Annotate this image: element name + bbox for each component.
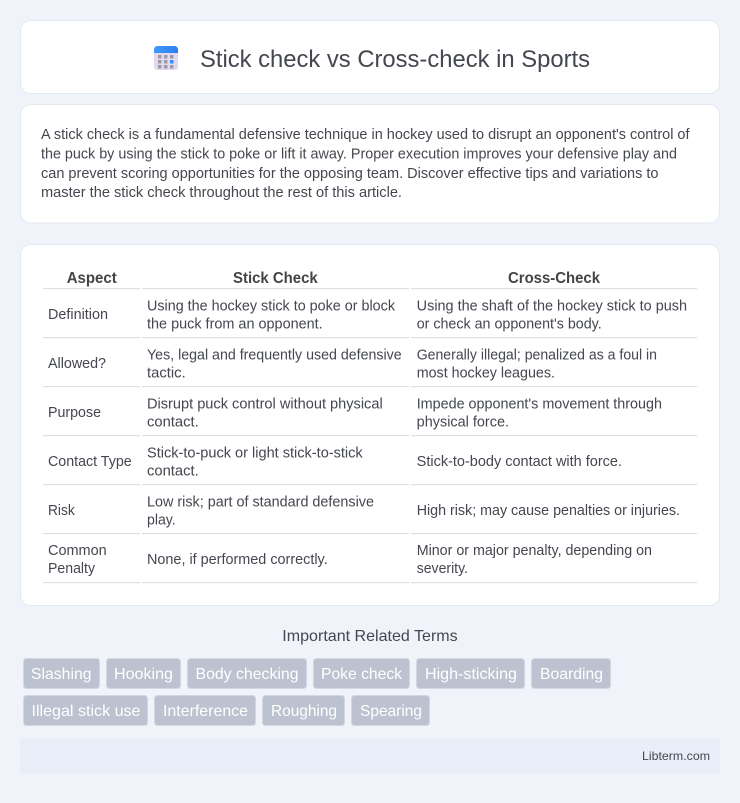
tag: poke check: Poke check [321,666,403,683]
tag: spearing: Spearing [360,703,422,720]
row: purpose [43,396,697,436]
row: common penalty: Common [48,543,107,559]
tags: related terms [24,658,610,726]
row: common penalty: Minor or major penalty, depending on [417,543,652,559]
row: contact type: contact. [147,464,199,480]
row: allowed: Yes, legal and frequently used defensive [147,348,402,364]
intro paragraph: can prevent scoring opportunities for the opposing team. Discover effective tips and variations to [41,166,658,182]
table header: Cross-Check [508,270,600,287]
tag: spearing [352,696,430,726]
tag: illegal stick use: Illegal stick use [32,703,141,720]
row: definition [43,298,697,338]
row: risk [43,494,697,534]
table header: Stick Check [233,270,318,287]
row: definition: Using the shaft of the hockey stick to push [417,298,687,314]
tag: roughing [262,696,344,726]
heading: important related terms: Important Related Terms [282,628,458,645]
row: risk: play. [147,512,176,528]
row: common penalty: severity. [417,561,468,577]
intro paragraph: master the stick check throughout the rest of this article. [41,185,402,201]
row: allowed: tactic. [147,366,186,382]
row: contact type: Stick-to-puck or light stick-to-stick [147,446,364,462]
tag: slashing: Slashing [31,666,92,683]
row: common penalty: Penalty [48,561,96,577]
tag: body checking: Body checking [196,666,298,683]
tag: hooking [106,658,180,688]
title: Stick check vs Cross-check in Sports [200,46,590,73]
panel: title header [20,20,720,94]
row: risk: Risk [48,503,75,519]
row: risk: Low risk; part of standard defensive [147,494,374,510]
tag: boarding: Boarding [540,666,603,683]
tag: body checking [188,658,306,688]
tag: roughing: Roughing [271,703,337,720]
row: purpose: physical force. [417,414,509,430]
tag: poke check [314,658,410,688]
row: definition: Using the hockey stick to poke or block [147,298,396,314]
row: definition: the puck from an opponent. [147,316,323,332]
tag: slashing [24,658,100,688]
panel: introduction [20,104,720,223]
table header [43,270,697,289]
row: risk: High risk; may cause penalties or injuries. [417,503,680,519]
footer credit: Libterm.com [642,749,710,763]
row: allowed: Allowed? [48,356,106,372]
footer bar [20,739,720,773]
panel: comparison table [20,244,720,606]
intro paragraph: the puck by using the stick to poke or lift it away. Proper execution improves your defensive play and [41,146,677,162]
tag: high-sticking: High-sticking [425,666,517,683]
row: definition: Definition [48,307,108,323]
row: contact type: Contact Type [48,454,132,470]
tag: interference: Interference [163,703,248,720]
tag: illegal stick use [24,696,148,726]
row: purpose: contact. [147,414,199,430]
row: purpose: Purpose [48,405,101,421]
tag: interference [154,696,256,726]
row: allowed [43,348,697,387]
row: contact type: Stick-to-body contact with force. [417,454,622,470]
tag: high-sticking [416,658,524,688]
row: allowed: most hockey leagues. [417,366,555,382]
row: purpose: Impede opponent's movement through [417,396,662,412]
row: definition: or check an opponent's body. [417,316,602,332]
icon: calendar [154,46,178,70]
row: common penalty [43,543,697,583]
tag: boarding [532,658,610,688]
row: purpose: Disrupt puck control without physical [147,396,383,412]
table header: Aspect [67,270,117,287]
intro paragraph [41,127,690,201]
row: contact type [43,446,697,485]
row: allowed: Generally illegal; penalized as a foul in [417,348,657,364]
tag: hooking: Hooking [114,666,173,683]
intro paragraph: A stick check is a fundamental defensive technique in hockey used to disrupt an opponent's control of [41,127,690,143]
row: common penalty: None, if performed correctly. [147,552,328,568]
